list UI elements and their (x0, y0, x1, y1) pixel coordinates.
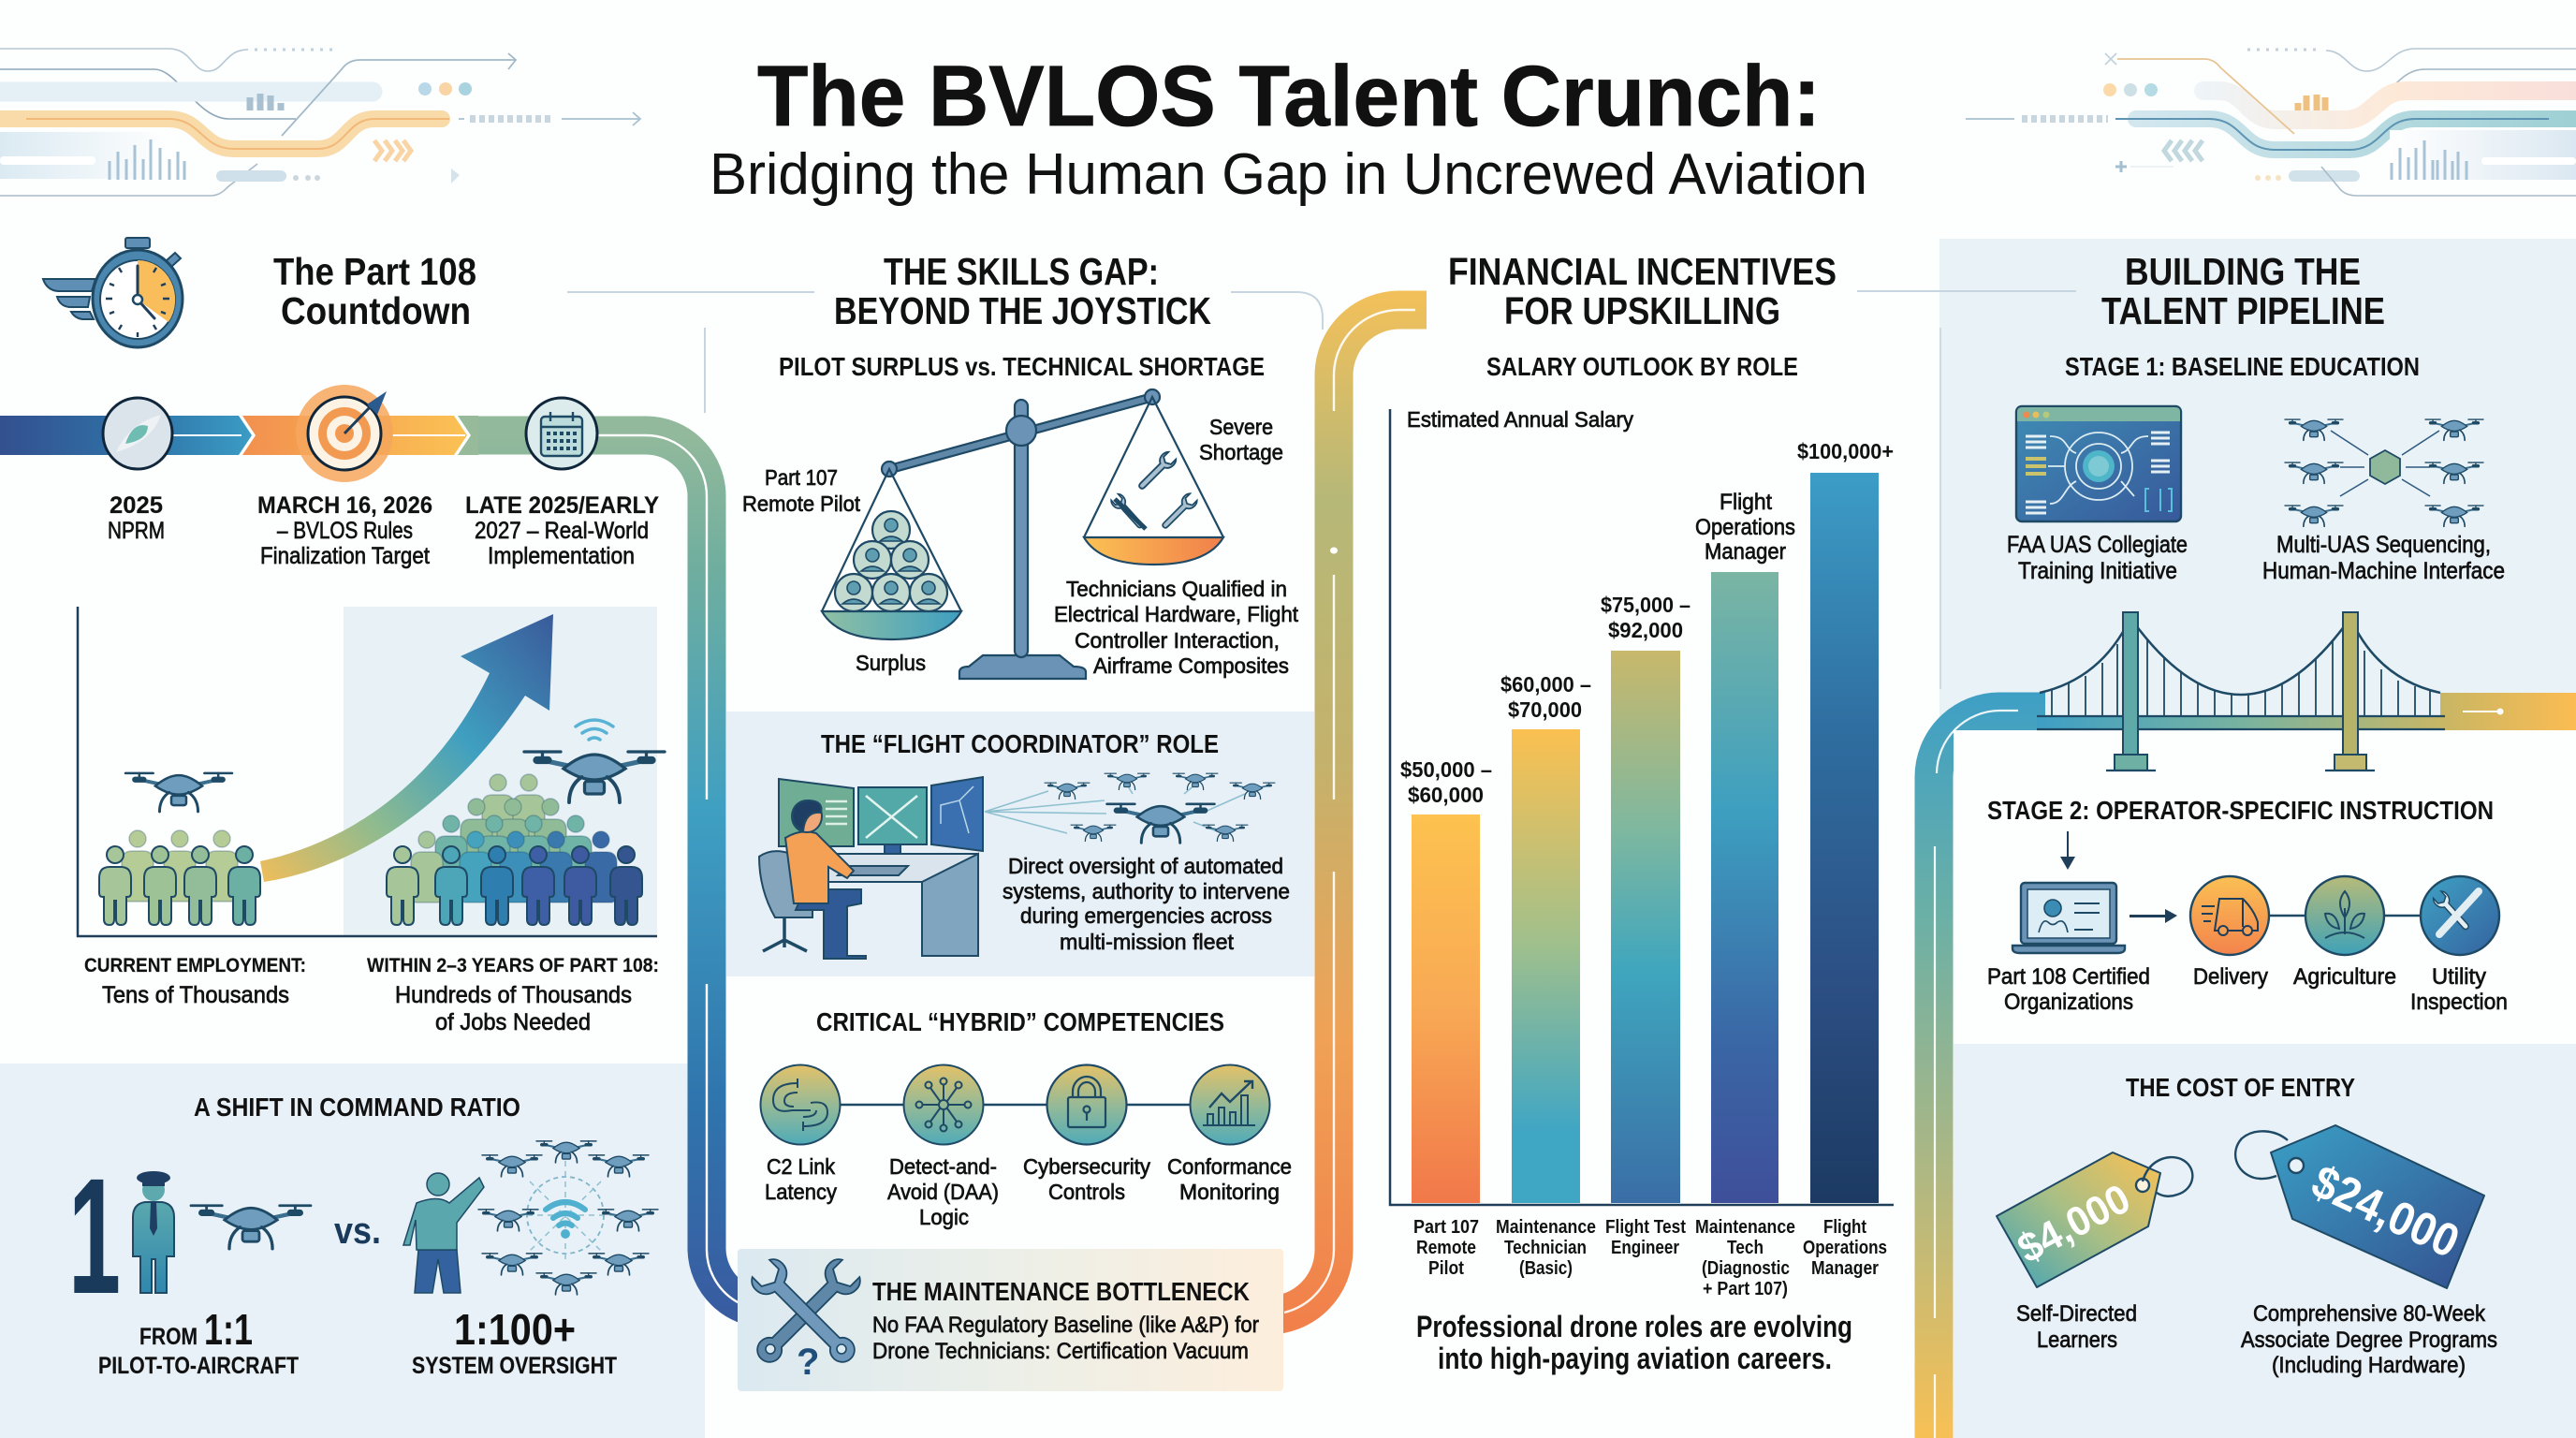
labels: competencies: Controls (1048, 1180, 1125, 1204)
label: from 1:1: PILOT-TO-AIRCRAFT (98, 1353, 299, 1379)
text: bottleneck description: Drone Technicians: Certification Vacuum (872, 1339, 1249, 1364)
heading: financial incentives: FOR UPSKILLING (1504, 289, 1780, 332)
icon: utility inspection tools (2421, 876, 2499, 955)
icon: c2 link latency (760, 1065, 841, 1144)
axis labels: (Diagnostic (1702, 1258, 1790, 1279)
labels: competencies: Avoid (DAA) (887, 1180, 999, 1204)
icon: agriculture plant (2305, 876, 2384, 955)
price tag: $24,000: $24,000 (2305, 1154, 2467, 1268)
label: comprehensive degree programs: (Including Hardware) (2272, 1353, 2466, 1378)
illustration: suspension bridge (2037, 612, 2576, 770)
label: current employment: CURRENT EMPLOYMENT: (84, 955, 306, 976)
subtitle: Bridging the Human Gap in Uncrewed Aviation (710, 142, 1867, 207)
employment growth chart (78, 607, 665, 1035)
labels: stage 2 (1987, 964, 2508, 1015)
axis labels: Manager (1811, 1258, 1879, 1279)
text: bottleneck description (872, 1313, 1259, 1364)
axis labels: Part 107 (1413, 1217, 1479, 1238)
labels: competencies: Monitoring (1179, 1180, 1280, 1204)
label: multi-uas sequencing: Multi-UAS Sequencing, (2276, 532, 2491, 558)
text: vs: vs. (334, 1211, 381, 1252)
section: building the talent pipeline (1954, 250, 2576, 1044)
subheading: stage 2: STAGE 2: OPERATOR-SPECIFIC INSTRUCTION (1987, 796, 2494, 825)
label: current employment: Tens of Thousands (102, 982, 289, 1008)
price tag: $4,000 (1997, 1152, 2192, 1287)
heading: building the talent pipeline: TALENT PIPELINE (2101, 289, 2385, 332)
bar: flight test engineer (1611, 651, 1680, 1203)
heading: flight coordinator: THE “FLIGHT COORDINATOR” ROLE (821, 729, 1219, 758)
text: bottleneck description: No FAA Regulatory Baseline (like A&P) for (872, 1313, 1259, 1338)
value labels: Manager (1705, 539, 1786, 565)
axis labels: (Basic) (1519, 1258, 1573, 1279)
arrow: down to laptop (2060, 831, 2075, 870)
label: severe shortage (1199, 415, 1283, 464)
axis labels: Technician (1504, 1238, 1587, 1258)
label: multi-uas sequencing: Human-Machine Interface (2262, 558, 2505, 584)
heading: skills gap: BEYOND THE JOYSTICK (834, 289, 1211, 332)
value labels: Flight (1720, 490, 1772, 515)
panel: right column upper background (1939, 239, 2576, 730)
axis labels: Flight Test (1605, 1217, 1686, 1238)
section: part 108 countdown (43, 238, 476, 347)
icon: certified organization laptop (2012, 883, 2125, 953)
icon: training screen (2016, 406, 2181, 521)
label: late 2025 early 2027: LATE 2025/EARLY (465, 492, 659, 519)
text: direct oversight (1003, 854, 1290, 954)
heading: the part 108 countdown: Countdown (281, 289, 471, 332)
text: professional drone roles: Professional drone roles are evolving (1416, 1310, 1852, 1343)
label: multi-uas sequencing (2262, 532, 2505, 584)
label: 2025 (108, 492, 165, 544)
label: current employment (84, 955, 306, 1008)
icon: drone swarm network (478, 1141, 658, 1295)
illustration: coordinated fleet (985, 773, 1275, 843)
road: pipeline right pipe (1934, 711, 2045, 1438)
label: severe shortage: Shortage (1199, 440, 1283, 464)
people: future workforce crowd (387, 774, 642, 925)
icon: calendar (526, 398, 597, 469)
icon: cybersecurity lock (1046, 1065, 1127, 1144)
labels: competencies: C2 Link (767, 1154, 835, 1179)
header decoration right (1966, 49, 2576, 196)
label: late 2025 early 2027 (465, 492, 659, 569)
icon: crossed wrenches with question mark (748, 1255, 864, 1383)
label: march 16 2026: – BVLOS Rules (277, 518, 413, 544)
label: 2025: NPRM (108, 518, 165, 544)
text: technicians qualified: Technicians Qualified in (1066, 577, 1287, 601)
axis labels: Operations (1803, 1238, 1887, 1258)
subheading: pilot surplus vs technical shortage: PILOT SURPLUS vs. TECHNICAL SHORTAGE (779, 352, 1265, 381)
heading: the cost of entry: THE COST OF ENTRY (2126, 1073, 2355, 1102)
label: within 2-3 years: of Jobs Needed (435, 1009, 591, 1035)
label: within 2-3 years (367, 955, 659, 1035)
axis labels: Tech (1727, 1238, 1764, 1258)
value labels: $100,000+ (1797, 439, 1894, 463)
heading: skills gap (834, 250, 1211, 332)
label: self-directed learners: Self-Directed (2016, 1301, 2137, 1327)
value labels: $50,000 – (1400, 757, 1492, 782)
label: part 107 remote pilot: Part 107 (765, 465, 838, 490)
label: late 2025 early 2027: 2027 – Real-World (475, 518, 649, 544)
text: technicians qualified: Electrical Hardware, Flight (1054, 602, 1299, 626)
section: shift in command ratio (68, 1093, 658, 1379)
icon: person pointing (403, 1173, 484, 1293)
label: part 107 remote pilot: Remote Pilot (742, 492, 861, 516)
heading: the part 108 countdown (273, 250, 476, 332)
icon: delivery truck (2190, 876, 2269, 955)
label: self-directed learners: Learners (2037, 1328, 2117, 1353)
chart shaded future area (344, 607, 657, 936)
illustration: coordinator at workstation (759, 777, 983, 959)
timeline segment: blue (0, 416, 252, 455)
label: part 107 remote pilot (742, 465, 861, 516)
heading: building the talent pipeline: BUILDING THE (2125, 250, 2361, 293)
panel: left lower background (0, 1064, 705, 1438)
label: within 2-3 years: WITHIN 2–3 YEARS OF PART 108: (367, 955, 659, 976)
people: current workforce (99, 830, 260, 925)
callout: the maintenance bottleneck (738, 1249, 1283, 1391)
label: march 16 2026: Finalization Target (260, 543, 430, 569)
label: march 16 2026: MARCH 16, 2026 (257, 492, 432, 519)
label: 2025: 2025 (110, 492, 163, 519)
arrow: laptop to delivery (2130, 909, 2177, 923)
timeline (0, 385, 659, 569)
label: late 2025 early 2027: Implementation (488, 543, 635, 569)
axis labels: Pilot (1428, 1258, 1464, 1279)
axis labels (1413, 1217, 1887, 1299)
icon: conformance monitoring chart (1191, 1065, 1269, 1144)
label: self-directed learners (2016, 1301, 2137, 1353)
section: hybrid competencies (760, 1007, 1292, 1229)
timeline segment: green start (458, 416, 478, 455)
icon: large drone with signal (524, 720, 665, 802)
label: within 2-3 years: Hundreds of Thousands (395, 982, 632, 1008)
value labels (1400, 439, 1894, 807)
labels: competencies: Conformance (1167, 1154, 1292, 1179)
label: from 1:1: 1:1 (204, 1305, 253, 1354)
heading: financial incentives: FINANCIAL INCENTIVES (1448, 250, 1837, 293)
icon: multi-uas hub (2285, 419, 2483, 526)
label: 1:100+: 1:100+ (454, 1305, 576, 1354)
bar: maintenance tech diagnostic (1711, 572, 1778, 1203)
timeline segment: orange (242, 416, 467, 455)
labels: stage 2: Agriculture (2293, 964, 2396, 990)
label: comprehensive degree programs (2241, 1301, 2497, 1378)
subheading: salary outlook: SALARY OUTLOOK BY ROLE (1486, 352, 1798, 381)
heading: critical hybrid competencies: CRITICAL “HYBRID” COMPETENCIES (816, 1007, 1224, 1036)
white area below bridge road (1954, 730, 2576, 1044)
text: bottleneck heading: THE MAINTENANCE BOTTLENECK (872, 1277, 1250, 1306)
text: direct oversight: systems, authority to intervene (1003, 879, 1290, 903)
arrow: growth (260, 614, 553, 882)
label: comprehensive degree programs: Associate Degree Programs (2241, 1328, 2497, 1353)
section: the skills gap (742, 250, 1299, 679)
label: faa uas collegiate (2007, 532, 2188, 584)
text: direct oversight: multi-mission fleet (1060, 930, 1235, 954)
labels: competencies (765, 1154, 1292, 1229)
heading: the part 108 countdown: The Part 108 (273, 250, 476, 293)
axis labels: + Part 107) (1703, 1279, 1788, 1299)
labels: stage 2: Inspection (2410, 990, 2508, 1015)
bar chart: salary by role: Estimated Annual Salary (1407, 407, 1633, 432)
text: technicians qualified: Airframe Composites (1093, 653, 1289, 678)
label: from 1:1: FROM (139, 1324, 198, 1350)
label: from 1:1 (98, 1305, 299, 1379)
icon: target with dart (296, 385, 393, 482)
text: technicians qualified (1054, 577, 1299, 678)
section: financial incentives (1390, 250, 1894, 1375)
road: central orange pipe (1268, 310, 1427, 1315)
connector lines between column headings (567, 291, 2076, 689)
icon: pilot (133, 1171, 174, 1293)
title: The BVLOS Talent Crunch: (757, 49, 1821, 144)
value labels: $60,000 – (1500, 672, 1591, 697)
road: left timeline pipe (476, 435, 768, 1309)
labels: stage 2: Organizations (2004, 990, 2133, 1015)
bar: flight operations manager (1810, 473, 1879, 1203)
axis labels: Remote (1416, 1238, 1476, 1258)
section: flight coordinator role (759, 729, 1290, 959)
bar: part 107 remote pilot (1412, 814, 1480, 1203)
label: severe shortage: Severe (1209, 415, 1273, 439)
bar: maintenance technician basic (1512, 729, 1580, 1203)
labels: competencies: Logic (919, 1205, 969, 1229)
labels: competencies: Detect-and- (889, 1154, 997, 1179)
label: faa uas collegiate: Training Initiative (2018, 558, 2177, 584)
labels: stage 2: Delivery (2193, 964, 2268, 990)
labels: stage 2: Part 108 Certified (1987, 964, 2150, 990)
text: direct oversight: during emergencies across (1020, 903, 1272, 928)
icon: detect and avoid logic (904, 1065, 983, 1144)
text: direct oversight: Direct oversight of automated (1008, 854, 1283, 878)
labels: stage 2: Utility (2432, 964, 2486, 990)
axis labels: Engineer (1611, 1238, 1679, 1258)
labels: competencies: Cybersecurity (1023, 1154, 1150, 1179)
text: technicians qualified: Controller Interaction, (1075, 628, 1280, 653)
text: professional drone roles (1416, 1310, 1852, 1375)
big numeral 1: 1 (68, 1145, 121, 1328)
bar chart: salary by role (1390, 407, 1894, 1299)
panel: right column lower background (1954, 1044, 2576, 1438)
label: faa uas collegiate: FAA UAS Collegiate (2007, 532, 2188, 558)
value labels: $75,000 – (1601, 593, 1690, 617)
icon: winged stopwatch (43, 238, 183, 347)
label: 1:100+ (412, 1305, 617, 1379)
header decoration left (0, 49, 640, 196)
panel: flight coordinator background (726, 712, 1314, 976)
value labels: $92,000 (1608, 618, 1683, 642)
heading: financial incentives (1448, 250, 1837, 332)
label: comprehensive degree programs: Comprehensive 80-Week (2253, 1301, 2486, 1327)
section: the cost of entry (1997, 1073, 2497, 1378)
label: 1:100+: SYSTEM OVERSIGHT (412, 1353, 617, 1379)
heading: skills gap: THE SKILLS GAP: (884, 250, 1159, 293)
icon: crossed wrenches with question mark: ? (797, 1342, 819, 1383)
icon: single drone (191, 1206, 311, 1249)
value labels: $60,000 (1408, 783, 1484, 807)
axis labels: Maintenance (1695, 1217, 1795, 1238)
icon: balance scale (822, 389, 1223, 679)
label: surplus: Surplus (856, 651, 926, 675)
heading: building the talent pipeline (2101, 250, 2385, 332)
label: march 16 2026 (257, 492, 432, 569)
price tag: $24,000 (2235, 1125, 2484, 1288)
subheading: stage 1: STAGE 1: BASELINE EDUCATION (2065, 352, 2420, 381)
price tag: $4,000: $4,000 (2011, 1176, 2138, 1272)
axis labels: Maintenance (1496, 1217, 1596, 1238)
heading: a shift in command ratio: A SHIFT IN COMMAND RATIO (194, 1093, 520, 1122)
labels: competencies: Latency (765, 1180, 837, 1204)
text: professional drone roles: into high-paying aviation careers. (1438, 1342, 1832, 1375)
value labels: $70,000 (1508, 697, 1582, 722)
value labels: Operations (1695, 515, 1795, 540)
axis labels: Flight (1823, 1217, 1866, 1238)
icon: 2025 milestone (103, 398, 172, 469)
icon: small drone (125, 773, 232, 812)
